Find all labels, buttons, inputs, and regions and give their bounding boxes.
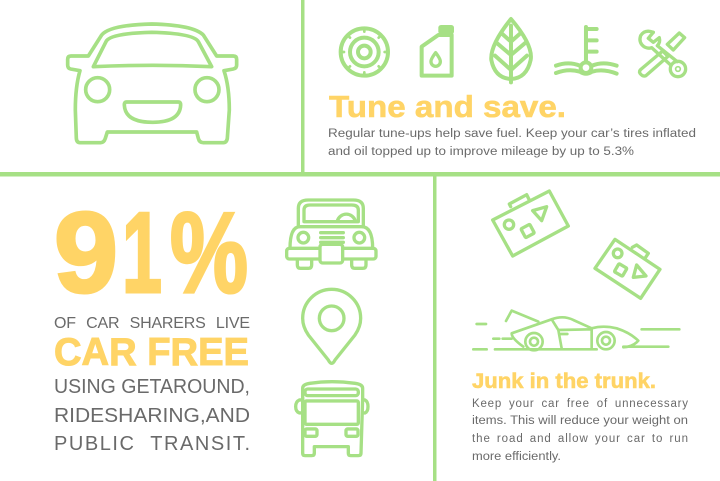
panel: junk in the trunk	[472, 191, 688, 463]
icon: tire	[341, 28, 388, 76]
heading: tune and save: Tune and save.	[329, 89, 566, 124]
big number: 91%: 1	[122, 190, 162, 317]
icon: car front view	[68, 24, 237, 143]
text block: tune and save body	[328, 128, 696, 158]
text: using getaround, ridesharing, and public transit: USING GETAROUND,	[54, 376, 250, 398]
text: of car sharers live: OF CAR SHARERS LIVE	[54, 315, 250, 332]
panel: car sharing statistic	[54, 190, 250, 455]
icon: sports car with open trunk	[473, 311, 679, 350]
text block: junk in the trunk body: Keep your car free of unnecessary	[472, 398, 688, 410]
text: using getaround, ridesharing, and public transit: PUBLIC TRANSIT.	[54, 433, 250, 455]
text block: junk in the trunk body: items. This will reduce your weight on	[472, 415, 688, 427]
text block: tune and save body: Regular tune-ups help save fuel. Keep your car’s tires inflated	[328, 128, 696, 140]
panel: tune and save	[328, 19, 696, 158]
text block: junk in the trunk body	[472, 398, 688, 463]
icon: suitcase left	[493, 191, 568, 256]
icon: oil bottle	[422, 25, 454, 76]
icon: bus	[296, 382, 368, 456]
big number: 91%: %	[170, 190, 248, 317]
text block: junk in the trunk body: more efficiently.	[472, 451, 561, 463]
icon: coolant thermometer	[556, 27, 617, 74]
text: car free: CAR FREE	[54, 331, 249, 374]
text: using getaround, ridesharing, and public transit: RIDESHARING,AND	[54, 405, 250, 427]
big number: 91%	[54, 190, 248, 317]
icon: leaf	[491, 19, 531, 82]
icon: vintage car	[287, 200, 376, 268]
text block: junk in the trunk body: the road and allow your car to run	[472, 433, 688, 445]
text block: tune and save body: and oil topped up to improve mileage by up to 5.3%	[328, 146, 634, 158]
icon: suitcase right	[595, 239, 660, 298]
text: using getaround, ridesharing, and public transit	[54, 376, 250, 455]
big number: 91%: 9	[54, 190, 118, 317]
icon: wrench and screwdriver	[640, 31, 686, 77]
icon: map pin	[303, 289, 361, 363]
heading: junk in the trunk: Junk in the trunk.	[472, 370, 656, 393]
